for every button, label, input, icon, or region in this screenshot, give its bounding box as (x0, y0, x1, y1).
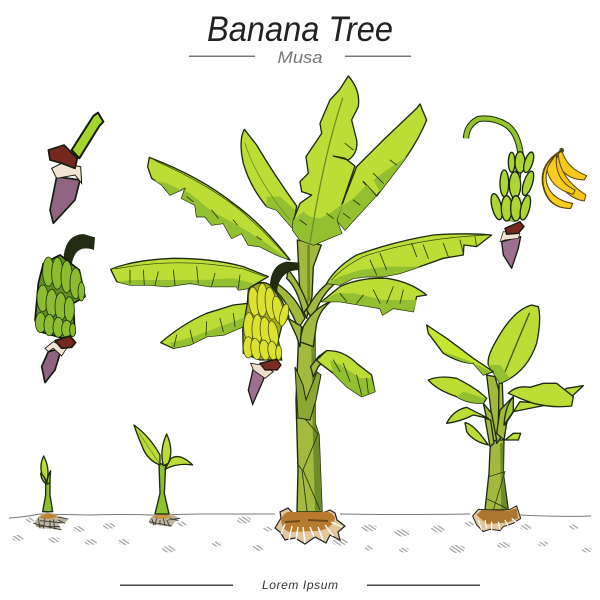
fingers (489, 151, 536, 221)
main roots (275, 508, 345, 544)
white petals (52, 163, 82, 183)
green bunch with bud (35, 234, 95, 383)
leaf right lower (322, 278, 427, 315)
yellow bunch on plant (243, 262, 299, 404)
leaf right long (327, 234, 492, 285)
pseudostem (295, 325, 322, 512)
leaf upper big (488, 305, 540, 383)
stalk (63, 234, 95, 265)
roots (473, 506, 521, 532)
main banana plant (111, 76, 492, 544)
leaf small left (465, 423, 488, 445)
leaf lower left (447, 407, 488, 423)
red bract (48, 145, 77, 168)
back fingers (555, 150, 587, 180)
leaf left lower (161, 303, 248, 348)
bud on green stem (48, 113, 103, 223)
leaf middle (162, 434, 171, 466)
bud stalk (270, 262, 299, 293)
young banana plant (427, 305, 583, 532)
title rule right (345, 56, 411, 57)
flower bud (248, 359, 281, 404)
immature bunch with curved stalk (466, 118, 536, 268)
purple bud (50, 177, 80, 223)
curved stalk (466, 118, 521, 222)
footer rule right (367, 584, 480, 586)
leaf right front (508, 383, 573, 407)
petioles (277, 240, 334, 377)
fingers (35, 255, 85, 338)
title rule left (189, 56, 255, 57)
leaf narrow top left (241, 129, 297, 228)
petioles (483, 375, 513, 447)
leaves (41, 456, 48, 483)
crown (559, 148, 564, 153)
red bract (505, 222, 524, 234)
ripe banana hand (542, 148, 587, 208)
white petals (500, 232, 520, 242)
subtitle: Musa (278, 48, 322, 67)
bud (502, 237, 521, 268)
front finger (542, 151, 573, 208)
title: Banana Tree (207, 10, 393, 49)
soil hatching (12, 516, 592, 553)
sapling small (33, 456, 68, 530)
leaf small right (505, 433, 521, 440)
leaf top centre (293, 76, 359, 245)
leaf lower small (317, 351, 375, 397)
trunk (485, 440, 508, 510)
bud (42, 336, 76, 383)
ground line (9, 514, 591, 518)
roots (149, 513, 180, 527)
sapling medium (134, 425, 193, 527)
leaf left (134, 425, 160, 465)
fingers (243, 283, 289, 360)
leaf thin right (504, 397, 513, 425)
stem (43, 480, 53, 512)
leaf far right (505, 386, 583, 425)
stem (155, 463, 169, 514)
green stem (72, 113, 103, 158)
leaf mid left (428, 377, 487, 403)
leaf upper left (148, 157, 290, 260)
roots (33, 512, 68, 530)
leaf top right (337, 104, 427, 230)
leaf upper left (427, 325, 493, 375)
leaf left long (111, 258, 268, 290)
footer rule left (120, 584, 233, 586)
leaf right (165, 457, 193, 469)
footer text: Lorem Ipsum (262, 578, 338, 592)
